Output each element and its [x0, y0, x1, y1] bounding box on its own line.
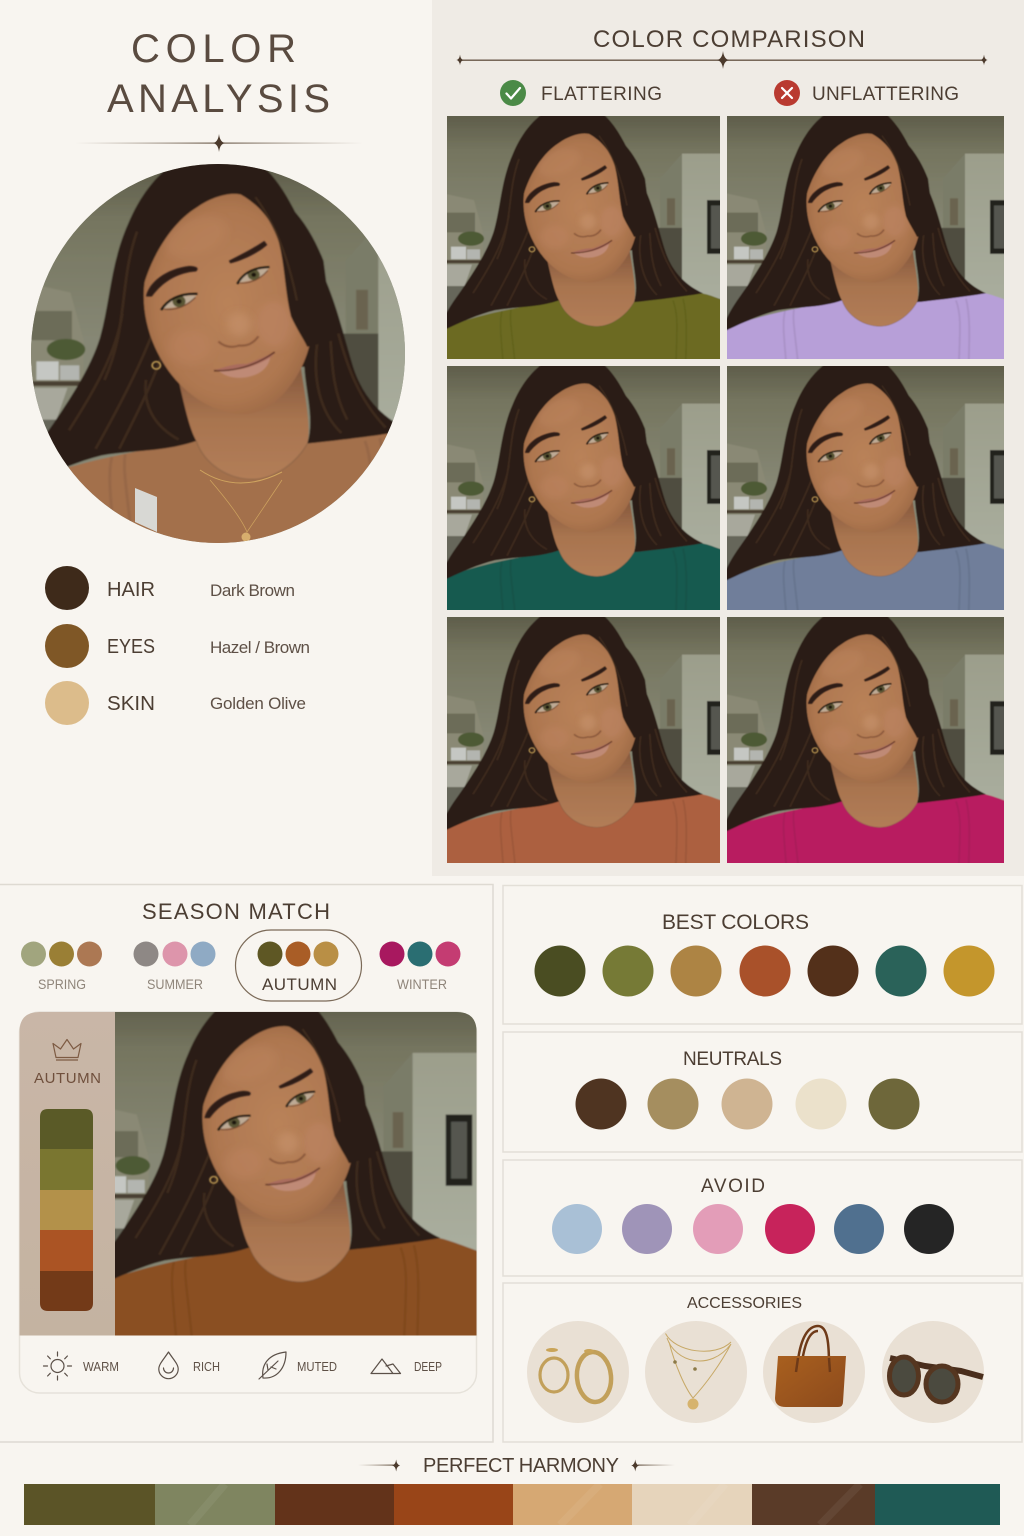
icon: warm sun: WARM [83, 1360, 119, 1374]
summer palette [134, 942, 216, 992]
hair swatch row [45, 566, 295, 610]
eyes swatch row: Hazel / Brown [210, 638, 310, 657]
panel: color analysis [31, 34, 405, 725]
photo: terracotta shirt [447, 617, 720, 863]
portrait circle [31, 164, 405, 543]
panel: avoid [503, 1160, 1022, 1276]
skin swatch row: Golden Olive [210, 694, 306, 713]
panel: season match [0, 884, 494, 1443]
portrait: autumn shirt [115, 1012, 476, 1336]
skin swatch row [45, 681, 306, 725]
flattering label: FLATTERING [541, 84, 662, 105]
unflattering label [774, 80, 959, 106]
panel: color comparison [377, 0, 1024, 948]
icon: rich drop [159, 1352, 220, 1379]
icon: deep mountains: DEEP [414, 1360, 442, 1374]
heading: SEASON MATCH [142, 899, 330, 924]
sidebar label: AUTUMN [34, 1070, 101, 1087]
photo: olive shirt [447, 116, 720, 359]
autumn palette strip [40, 1109, 93, 1311]
photo: lilac shirt [727, 116, 1004, 359]
panel: avoid: AVOID [701, 1176, 765, 1197]
autumn palette highlighted: AUTUMN [262, 975, 337, 994]
panel: neutrals [503, 1032, 1022, 1152]
winter palette: WINTER [397, 976, 447, 992]
unflattering label: UNFLATTERING [812, 84, 959, 105]
hair swatch row: HAIR [107, 579, 155, 601]
panel: best colors: BEST COLORS [662, 911, 809, 934]
accessory: tortoiseshell sunglasses [882, 1321, 984, 1423]
accessory: gold hoop earrings [527, 1321, 629, 1423]
panel: accessories [503, 1283, 1022, 1442]
icon: crown [53, 1040, 81, 1060]
title: COLOR [131, 27, 296, 71]
eyes swatch row [45, 624, 310, 668]
summer palette: SUMMER [147, 976, 203, 992]
hair swatch row: Dark Brown [210, 581, 295, 600]
flattering label [500, 80, 662, 106]
title: ANALYSIS [107, 77, 330, 121]
heading: COLOR COMPARISON [593, 26, 865, 53]
title [107, 27, 330, 121]
spring palette [21, 942, 102, 992]
panel: perfect harmony [24, 1455, 1000, 1525]
eyes swatch row: EYES [107, 636, 155, 658]
icon: muted leaf: MUTED [297, 1360, 337, 1374]
panel: accessories: ACCESSORIES [687, 1295, 802, 1312]
icon: warm sun [44, 1352, 119, 1380]
autumn palette highlighted [236, 930, 362, 1001]
icon: deep mountains [371, 1359, 442, 1374]
panel: neutrals: NEUTRALS [683, 1049, 782, 1070]
accessory: leather tote bag [763, 1321, 865, 1423]
photo: magenta shirt [727, 617, 1004, 863]
icon: rich drop: RICH [193, 1360, 220, 1374]
heading: PERFECT HARMONY [423, 1455, 619, 1477]
icon: muted leaf [259, 1352, 337, 1379]
panel: best colors [503, 886, 1022, 1024]
photo: teal shirt [447, 366, 720, 610]
winter palette [380, 942, 460, 992]
skin swatch row: SKIN [107, 693, 155, 715]
spring palette: SPRING [38, 976, 86, 992]
season card [18, 1011, 478, 1394]
accessory: layered necklace [645, 1321, 747, 1423]
harmony color stripe [24, 1484, 1000, 1525]
photo: slate shirt [727, 366, 1004, 610]
